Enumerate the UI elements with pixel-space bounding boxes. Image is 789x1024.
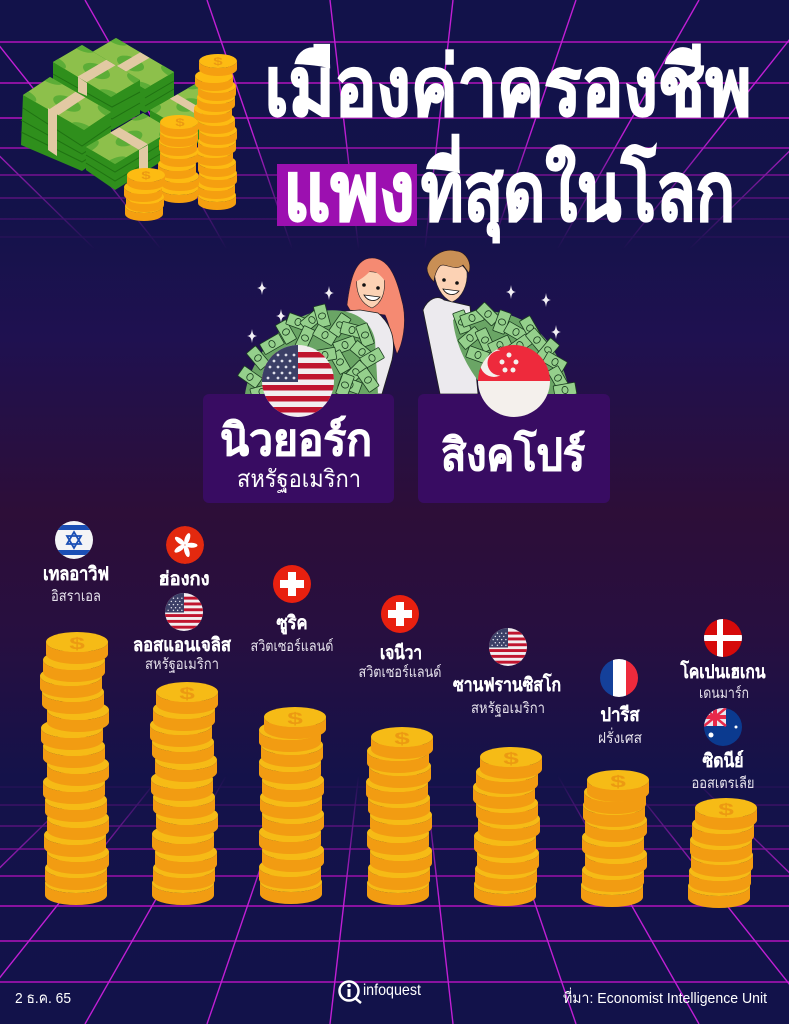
Singapore name: สิงคโปร์ [441,428,585,480]
hair [347,258,404,354]
label: Tel Aviv [43,564,109,605]
title line 2 highlighted word: แพง [283,147,415,238]
source: ที่มา: Economist Intelligence Unit [563,987,768,1007]
flag: USA, Los Angeles [165,593,203,631]
label: Geneva [358,642,442,681]
stack 4: Geneva [366,727,433,905]
date: 2 ธ.ค. 65 [15,990,71,1007]
stack 2: Hong Kong and Los Angeles: $ [179,684,195,703]
coin stack: short [124,168,165,221]
label: Los Angeles: ลอสแอนเจลิส [133,635,231,656]
face [357,272,384,308]
sparkles [247,281,561,343]
country: Australia: ออสเตรเลีย [692,775,754,792]
neck and face [434,262,467,302]
money pile: right [453,302,577,398]
flag: USA large [262,345,334,417]
eyes and smile [362,283,380,301]
illustration: man holding money [423,250,478,394]
label: Zurich: ซูริค [276,613,308,635]
fringe [355,264,387,284]
stack 2: Hong Kong and Los Angeles [150,682,218,905]
logo: infoquest: infoquest [363,982,421,999]
stack 1: Tel Aviv: $ [69,634,85,653]
flag: Singapore large [478,345,550,417]
coin stack: tall: $ [213,56,223,68]
flag: France [600,659,638,697]
flag: Switzerland, Zurich [273,565,311,603]
stack 4: Geneva: $ [394,729,410,748]
country: United States: สหรัฐอเมริกา [145,656,219,673]
cash: front bundle [69,103,189,190]
label: Copenhagen [680,660,766,702]
card: New York [203,394,394,503]
illustration: woman holding money [333,258,404,394]
coin stack: middle [158,115,199,203]
label: Copenhagen: โคเปนเฮเกน [680,660,766,683]
stack 5: San Francisco [473,747,542,906]
country: Denmark: เดนมาร์ก [699,685,749,702]
label: Zurich [250,613,334,655]
country: France: ฝรั่งเศส [598,727,642,747]
coin stack: short: $ [141,170,151,182]
cash: upper front bundle [36,35,157,130]
cash: left bundle [5,66,129,171]
flag: Switzerland, Geneva [381,595,419,633]
label: San Francisco [453,673,561,717]
country: Switzerland: สวิตเซอร์แลนด์ [250,638,334,655]
label: Geneva: เจนีวา [380,642,422,664]
hair [427,250,470,282]
shirt [423,298,478,394]
label: Sydney [692,750,754,792]
card: Singapore [418,394,610,503]
New York country: สหรัฐอเมริกา [237,466,361,493]
stack 3: Zurich [259,707,326,904]
coin stack: middle: $ [175,117,185,129]
stack 1: Tel Aviv [40,632,109,905]
label: Tel Aviv: เทลอาวิฟ [43,564,109,585]
shirt [333,310,393,394]
coin stack: tall [194,54,237,210]
label: San Francisco: ซานฟรานซิสโก [453,673,561,696]
flag: Israel [55,521,93,559]
label: Paris: ปารีส [600,704,640,726]
icon: cash bundles and coin stacks [5,28,241,221]
country: United States: สหรัฐอเมริกา [471,700,545,717]
country: Switzerland: สวิตเซอร์แลนด์ [358,664,442,681]
flag: Australia [704,708,742,746]
stack 6: Paris [581,770,649,907]
top perspective grid [0,0,789,244]
label: Paris [598,704,642,747]
logo: infoquest [340,982,421,1003]
New York name: นิวยอร์ก [220,415,372,465]
flag: USA, San Francisco [489,628,527,666]
stack 5: San Francisco: $ [503,749,519,768]
money pile: left [238,304,385,401]
label: Los Angeles [133,635,231,673]
cash: back right bundle [70,28,191,113]
bottom perspective grid [0,781,789,1024]
flag: Denmark [704,619,742,657]
cash: right bundle behind coins [135,74,241,155]
stack 6: Paris: $ [610,772,626,791]
stack 3: Zurich: $ [287,709,303,728]
country: Israel: อิสราเอล [51,588,101,605]
stack 7: Copenhagen and Sydney: $ [718,800,734,819]
eyes and smile [442,278,459,295]
label: Hong Kong: ฮ่องกง [158,569,210,590]
flag: Hong Kong [166,526,204,564]
stack 7: Copenhagen and Sydney [688,798,757,908]
label: Sydney: ซิดนีย์ [702,750,744,772]
title highlight box [277,164,417,226]
title [264,42,752,243]
